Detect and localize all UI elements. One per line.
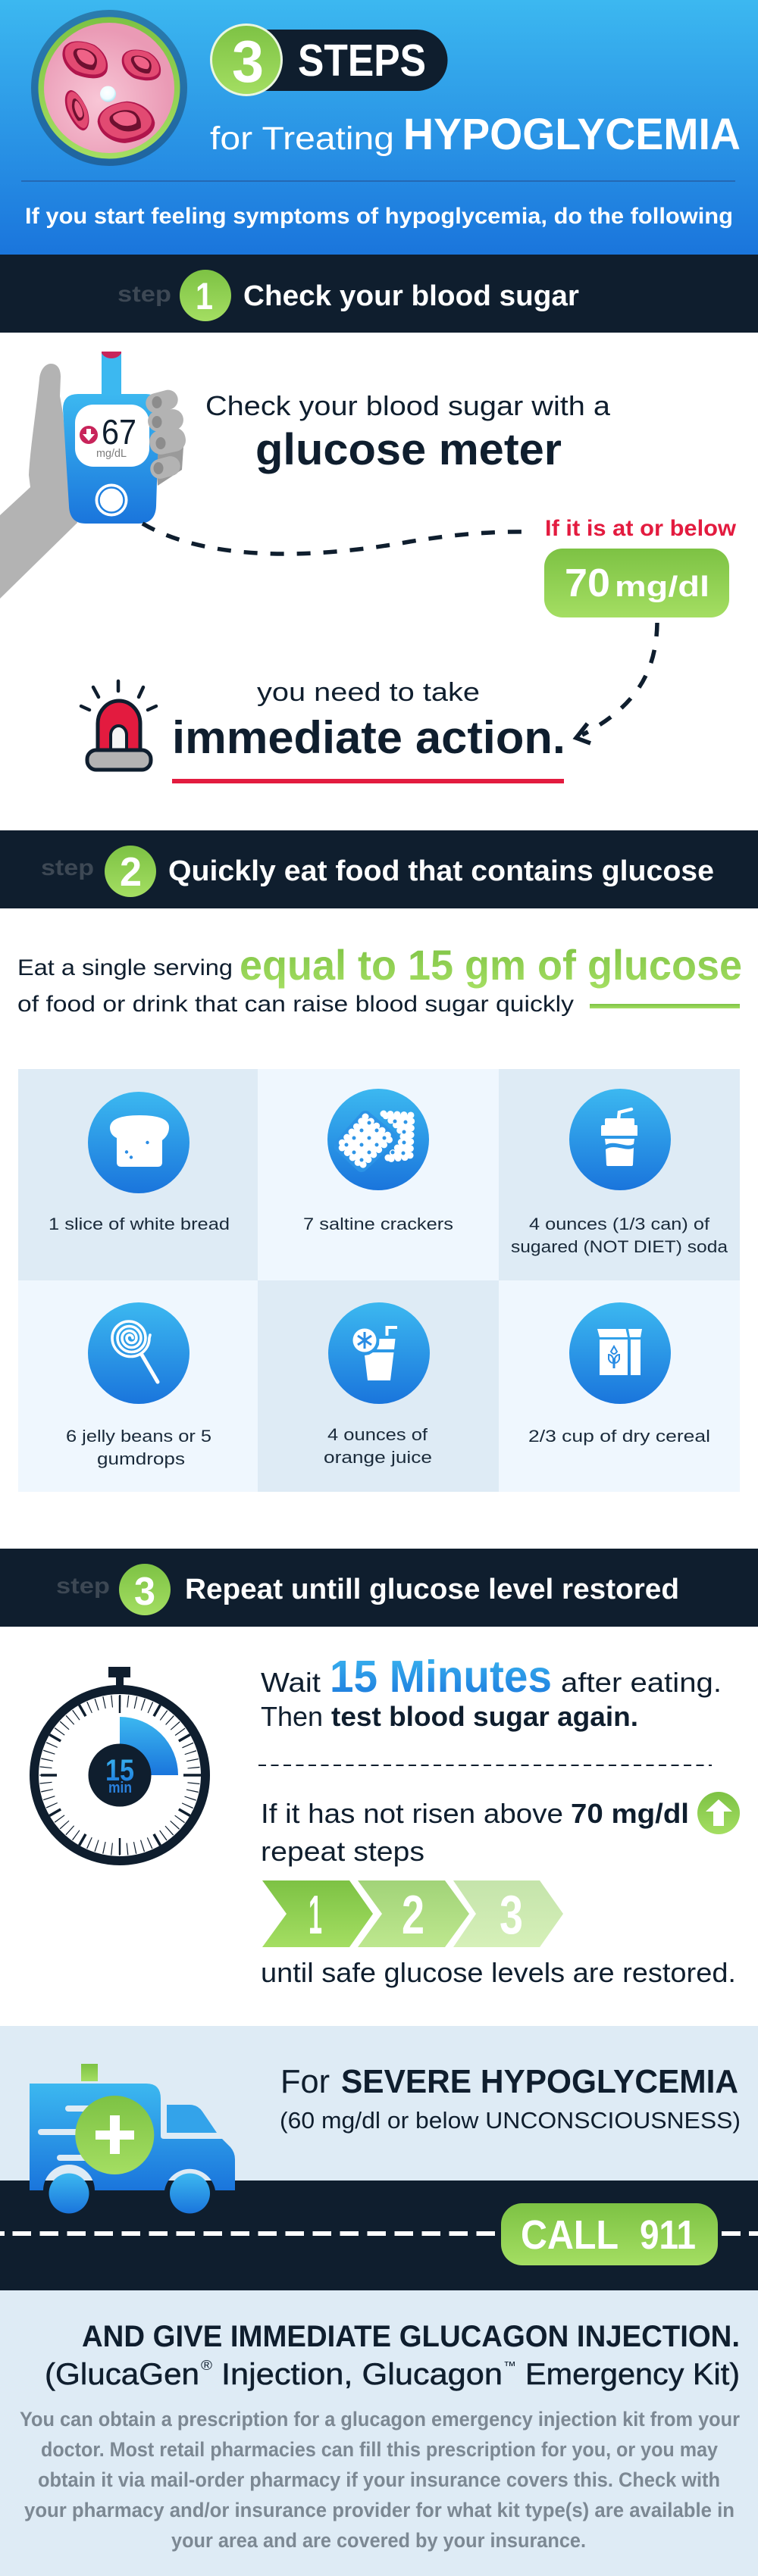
arrow: dashed curve meter to threshold: [143, 524, 532, 554]
title: for Treating: [210, 120, 394, 157]
text block: prescription note: your pharmacy and/or insurance provider for what kit type(s) are available in: [24, 2499, 735, 2521]
subtitle: If you start feeling symptoms of hypoglycemia, do the following: [25, 204, 733, 229]
threshold callout: 70: [565, 561, 610, 605]
road: [0, 2181, 758, 2290]
cell: white bread: [18, 1069, 258, 1280]
badge: 3 steps: 3: [232, 28, 264, 95]
text: wait 15 minutes: Then: [261, 1701, 323, 1732]
step 3 heading bar: [0, 1549, 758, 1627]
text: single serving intro: equal to 15 gm of glucose: [240, 941, 742, 989]
text: for severe hypoglycemia: SEVERE HYPOGLYCEMIA: [341, 2063, 738, 2100]
text: for severe hypoglycemia: For: [280, 2063, 330, 2100]
title: [210, 110, 741, 159]
cell: orange juice: [258, 1280, 499, 1492]
heading: glucagon injection: [45, 2320, 740, 2391]
cell: sugared soda: sugared (NOT DIET) soda: [511, 1237, 728, 1256]
cell: dry cereal: 2/3 cup of dry cereal: [528, 1427, 710, 1446]
cell: jelly beans: [18, 1280, 258, 1492]
cell: white bread: 1 slice of white bread: [49, 1215, 230, 1233]
cell: sugared soda: [499, 1069, 740, 1280]
text: immediate action: immediate action.: [172, 712, 565, 763]
heading: glucagon injection: Injection, Glucagon: [221, 2358, 503, 2391]
text: for severe hypoglycemia: (60 mg/dl or below UNCONSCIOUSNESS): [280, 2107, 741, 2134]
icon: up arrow: [697, 1792, 740, 1834]
cell: dry cereal: [499, 1280, 740, 1492]
step 3 heading bar: Repeat untill glucose level restored: [185, 1574, 679, 1605]
cell: orange juice: orange juice: [324, 1448, 432, 1467]
step 3 heading bar: 3: [134, 1570, 155, 1614]
panel: severe hypoglycemia: [0, 2026, 758, 2576]
chevrons: steps 1 2 3: [262, 1880, 563, 1947]
heading: glucagon injection: AND GIVE IMMEDIATE GLUCAGON INJECTION.: [82, 2320, 740, 2353]
text: if not risen: 70 mg/dl: [571, 1798, 689, 1829]
text: wait 15 minutes: [261, 1652, 722, 1732]
text: single serving intro: [17, 941, 742, 1017]
cell: jelly beans: gumdrops: [97, 1449, 185, 1468]
icon: hand holding glucose meter: mg/dL: [96, 447, 127, 460]
icon: stopwatch 15 min: [34, 1667, 205, 1861]
heading: glucagon injection: ™: [503, 2360, 516, 2373]
step 2 heading bar: 2: [120, 849, 142, 895]
text: check with glucose meter: Check your blood sugar with a: [205, 390, 611, 421]
cell: jelly beans: 6 jelly beans or 5: [66, 1427, 211, 1446]
chevrons: steps 1 2 3: 1: [309, 1885, 322, 1946]
header panel: [0, 0, 758, 255]
text: check with glucose meter: glucose meter: [255, 425, 562, 474]
text: if not risen: [261, 1798, 689, 1867]
threshold callout: [544, 516, 737, 617]
icon: stopwatch 15 min: min: [108, 1780, 132, 1796]
icon: blood cells medallion: [31, 10, 187, 166]
text: if not risen: repeat steps: [261, 1836, 424, 1867]
icon: stopwatch 15 min: 15: [105, 1754, 134, 1787]
text: single serving intro: Eat a single serving: [17, 955, 233, 980]
icon: hand holding glucose meter: [0, 352, 188, 599]
icon: hand holding glucose meter: 67: [102, 412, 136, 452]
cell: sugared soda: 4 ounces (1/3 can) of: [529, 1215, 710, 1233]
icon: ambulance: [30, 2064, 235, 2214]
step 1 heading bar: [0, 255, 758, 333]
text block: prescription note: obtain it via mail-order pharmacy if your insurance covers this. Check with: [38, 2468, 720, 2491]
step 2 heading bar: [0, 830, 758, 908]
cell: saltine crackers: 7 saltine crackers: [303, 1215, 453, 1233]
chevrons: steps 1 2 3: 2: [402, 1885, 424, 1946]
call 911 button: 911: [640, 2212, 696, 2258]
step 2 heading bar: Quickly eat food that contains glucose: [168, 855, 714, 887]
badge: 3 steps: STEPS: [298, 36, 426, 86]
text: wait 15 minutes: 15 Minutes: [330, 1652, 552, 1702]
text: until safe levels: until safe glucose levels are restored.: [261, 1957, 736, 1988]
text block: prescription note: [20, 2408, 740, 2552]
badge: 3 steps: [211, 24, 447, 95]
heading: glucagon injection: ®: [201, 2358, 212, 2373]
call 911 button: [501, 2203, 718, 2265]
heading: glucagon injection: Emergency Kit): [525, 2358, 740, 2391]
cell: saltine crackers: [258, 1069, 499, 1280]
text: wait 15 minutes: test blood sugar again.: [331, 1701, 638, 1732]
text: wait 15 minutes: after eating.: [561, 1667, 722, 1698]
step 2 heading bar: step: [41, 855, 94, 880]
text: immediate action: [172, 678, 565, 783]
text: immediate action: you need to take: [257, 678, 480, 707]
text: check with glucose meter: [205, 390, 611, 474]
text: single serving intro: of food or drink that can raise blood sugar quickly: [17, 992, 574, 1017]
threshold callout: If it is at or below: [545, 516, 737, 541]
text: for severe hypoglycemia: [280, 2063, 741, 2134]
title: HYPOGLYCEMIA: [403, 110, 741, 159]
step 1 heading bar: step: [117, 282, 171, 307]
step 1 heading bar: 1: [196, 275, 213, 317]
arrow: dashed curve threshold to action: [576, 623, 657, 743]
text: if not risen: If it has not risen above: [261, 1798, 563, 1829]
heading: glucagon injection: (GlucaGen: [45, 2358, 199, 2391]
step 3 heading bar: step: [56, 1574, 110, 1599]
food options grid: [18, 1069, 740, 1492]
call 911 button: CALL: [521, 2212, 619, 2258]
text: wait 15 minutes: Wait: [261, 1667, 321, 1698]
cell: orange juice: 4 ounces of: [327, 1425, 428, 1444]
step 1 heading bar: Check your blood sugar: [243, 280, 579, 312]
threshold callout: mg/dl: [615, 571, 709, 603]
text block: prescription note: your area and are covered by your insurance.: [171, 2529, 586, 2552]
chevrons: steps 1 2 3: 3: [500, 1885, 523, 1946]
text block: prescription note: doctor. Most retail pharmacies can fill this prescription for you, or you may: [41, 2438, 718, 2461]
icon: siren: [81, 681, 156, 770]
